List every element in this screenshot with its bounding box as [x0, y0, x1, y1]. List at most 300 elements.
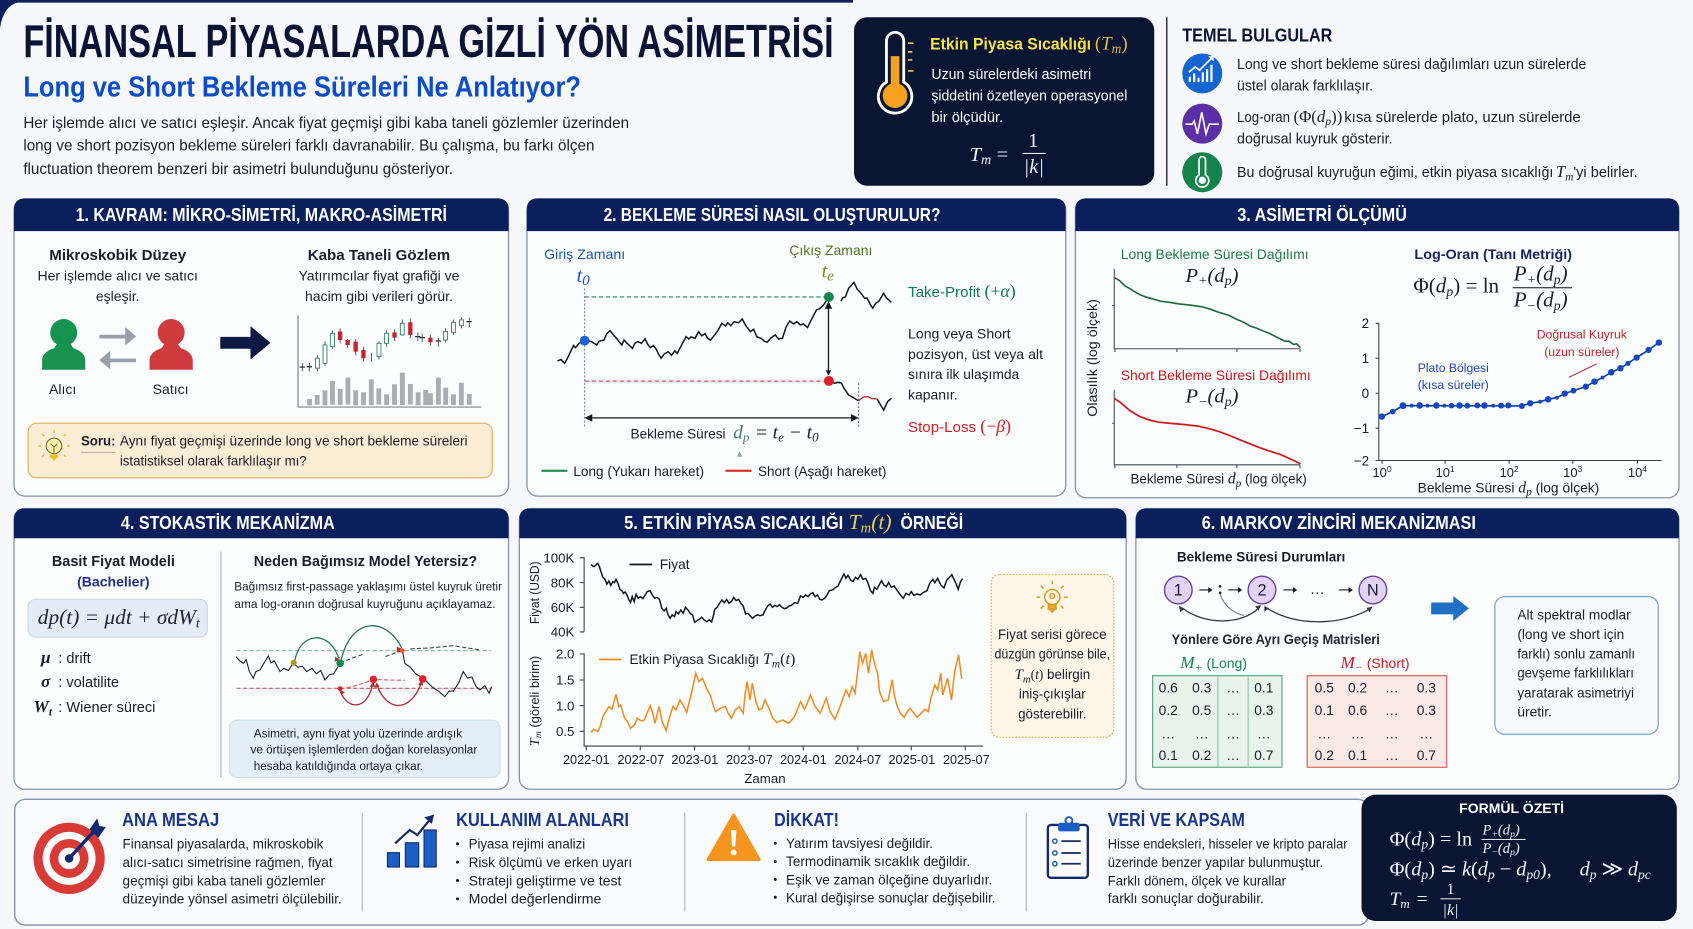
variable legend: : drift	[58, 651, 91, 667]
callout: spectral modes: Alt spektral modlar	[1517, 606, 1631, 622]
formula: log ratio: p	[1509, 847, 1515, 858]
entry label: Giriş Zamanı	[544, 246, 625, 262]
take-profit marker	[824, 292, 834, 302]
title: FİNANSAL PİYASALARDA GİZLİ YÖN ASİMETRİSİ	[23, 15, 834, 67]
formula: log ratio: d	[1503, 841, 1511, 857]
formula: linear tail: p	[1589, 867, 1597, 882]
why independent model fails heading: Neden Bağımsız Model Yetersiz?	[254, 553, 477, 570]
use cases	[456, 809, 632, 907]
matrix: short: 0.3	[1417, 702, 1436, 718]
card text	[931, 67, 1127, 126]
panel 4: stochastic mechanism	[14, 509, 509, 789]
key message: düzeyinde yönsel asimetri ölçülebilir.	[123, 891, 342, 907]
log ratio formula: (	[1536, 262, 1545, 286]
variable legend: σ	[41, 672, 51, 691]
matrix: long: …	[1226, 726, 1240, 742]
callout: temperature note: gösterebilir.	[1018, 707, 1086, 722]
chart: temperature: 2025-07	[943, 752, 990, 767]
finding 2: ))	[1331, 107, 1342, 126]
matrix: long: …	[1226, 680, 1240, 696]
take-profit label: Take-Profit (+α)	[908, 281, 1016, 302]
data and scope: Hisse endeksleri, hisseler ve kripto paralar	[1108, 836, 1348, 852]
arrow: barrier range	[825, 301, 832, 376]
formula: temperature: m	[1400, 896, 1410, 911]
icon: lightbulb	[1037, 581, 1068, 612]
formula: log ratio: p	[1509, 829, 1515, 840]
formula: log ratio: d	[1503, 823, 1511, 839]
chart: temperature: m	[772, 658, 780, 670]
chart: temperature: t)	[785, 650, 795, 668]
holding time formula: t	[807, 422, 812, 443]
note box: Asimetri, aynı fiyat yolu üzerinde ardışık	[254, 726, 463, 740]
legend: Long (Yukarı hareket)	[573, 463, 704, 479]
holding time formula: 0	[812, 430, 819, 445]
chart: log ratio: Doğrusal Kuyruk	[1537, 327, 1628, 341]
chart: temperature: 2025-01	[888, 752, 935, 767]
chart: log ratio: 2	[1362, 316, 1369, 331]
intro paragraph: Her işlemde alıcı ve satıcı eşleşir. Ancak fiyat geçmişi gibi kaba taneli gözlemler üzerinden	[23, 115, 629, 132]
use cases: Model değerlendirme	[469, 891, 602, 907]
matrix: long: 0.2	[1192, 747, 1211, 763]
intro paragraph	[23, 115, 629, 178]
caution	[774, 809, 996, 906]
chart: price: Fiyat	[660, 556, 690, 572]
chart: log ratio: 10	[1500, 465, 1514, 480]
chart: short distribution: P	[1186, 386, 1198, 408]
chart: temperature: (göreli birim)	[527, 656, 542, 731]
chart: log ratio: 0	[1362, 386, 1369, 401]
formula: temperature: 1	[1447, 880, 1455, 898]
card heading: )	[1121, 34, 1128, 55]
caution: Kural değişirse sonuçlar değişebilir.	[786, 890, 996, 906]
matrix: short: 0.6	[1348, 702, 1368, 718]
chart: temperature: 2024-07	[834, 752, 881, 767]
finding 3	[1237, 162, 1638, 183]
chart: log ratio: 10	[1372, 465, 1387, 480]
formula: log ratio: )	[1514, 823, 1520, 839]
exit label: e	[827, 269, 834, 285]
callout: research question	[28, 423, 492, 478]
matrix: long: 0.3	[1254, 702, 1274, 718]
panel 6: markov chain mechanism	[1136, 509, 1679, 789]
panel 1 heading: 1. KAVRAM: MİKRO-SİMETRİ, MAKRO-ASİMETRİ	[76, 204, 447, 225]
formula: linear tail: k(d	[1462, 859, 1488, 881]
chart: long distribution: p	[1224, 273, 1232, 289]
chart: log ratio: 1	[1450, 464, 1455, 474]
chart: log ratio: 3	[1578, 464, 1583, 474]
finding 2	[1237, 107, 1581, 148]
log ratio formula: p	[1553, 298, 1561, 314]
chart: price: 100K	[543, 551, 575, 566]
matrix: long: 0.6	[1159, 680, 1178, 696]
data and scope: VERİ VE KAPSAM	[1108, 809, 1245, 830]
key message: geçmişi gibi kaba taneli gözlemler	[123, 872, 325, 888]
diagram: state chain	[1164, 576, 1387, 622]
formula: log ratio	[1390, 823, 1526, 858]
use cases: KULLANIM ALANLARI	[456, 809, 629, 830]
matrix: long: 0.1	[1254, 680, 1273, 696]
chart: short distribution: (	[1208, 386, 1216, 408]
chart: temperature: m	[533, 731, 544, 738]
holding time formula: Bekleme Süresi	[631, 425, 726, 441]
formula: linear tail: ),	[1540, 859, 1552, 881]
log ratio formula: p	[1553, 272, 1561, 288]
icon: buyer: Alıcı	[49, 381, 76, 397]
key message: Finansal piyasalarda, mikroskobik	[123, 836, 323, 852]
matrix: short: …	[1385, 702, 1399, 718]
formula: Tm = 1/|k|: T	[970, 144, 981, 166]
microscopic level text: eşleşir.	[96, 288, 140, 304]
chart: long distribution	[1112, 246, 1309, 352]
candlestick and volume chart	[298, 315, 482, 407]
card heading: (T	[1095, 34, 1112, 55]
explanation text	[234, 580, 502, 611]
matrix: long: …	[1257, 726, 1271, 742]
chart: long distribution: )	[1231, 265, 1239, 287]
microscopic level text: Mikroskobik Düzey	[49, 247, 187, 264]
intro paragraph: fluctuation theorem benzeri bir asimetri bulunduğunu gösteriyor.	[23, 161, 453, 178]
formula: linear tail: ≫	[1597, 859, 1628, 881]
chart: temperature: 2024-01	[780, 752, 827, 767]
chart: long distribution: +	[1198, 273, 1208, 289]
card text: Uzun sürelerdeki asimetri	[931, 67, 1091, 83]
data and scope: üzerinde benzer yapılar bulunmuştur.	[1108, 854, 1323, 870]
key message: alıcı-satıcı simetrisine rağmen, fiyat	[123, 854, 333, 870]
log ratio heading: Log-Oran (Tanı Metriği)	[1414, 246, 1572, 262]
icon: pulse circle	[1182, 104, 1222, 144]
log ratio formula	[1413, 262, 1572, 314]
card text: bir ölçüdür.	[931, 110, 1003, 126]
panel 4 heading: 4. STOKASTİK MEKANİZMA	[121, 512, 335, 533]
explanation text: ama log-oranın doğrusal kuyruğunu açıklayamaz.	[234, 597, 496, 611]
exit label: Çıkış Zamanı	[789, 242, 872, 258]
icon: buyer	[42, 319, 85, 397]
chart: log ratio: 0	[1387, 464, 1392, 474]
icon: growth bars	[387, 815, 436, 867]
barrier explanation	[908, 325, 1043, 403]
variable legend: : Wiener süreci	[58, 700, 155, 716]
callout: spectral modes: farklı) sonlu zamanlı	[1517, 645, 1635, 661]
log ratio formula: −	[1527, 298, 1536, 314]
formula: linear tail: −	[1495, 859, 1516, 881]
panel: key findings	[1182, 25, 1638, 192]
formula: log ratio: −	[1491, 847, 1498, 858]
finding 3: m	[1565, 171, 1573, 183]
chart: log ratio: 10	[1628, 465, 1642, 480]
holding time formula: = t	[755, 422, 778, 443]
panel 3: asymmetry measurement	[1075, 199, 1679, 499]
log ratio formula: P	[1514, 288, 1527, 312]
chart: log ratio: 4	[1642, 464, 1647, 474]
callout: spectral modes: (long ve short için	[1517, 626, 1624, 642]
panel 5 heading: 5. ETKİN PİYASA SICAKLIĞI	[624, 512, 843, 533]
bottom summary bar	[15, 799, 1369, 926]
finding 1	[1237, 57, 1586, 95]
log ratio formula: ) = ln	[1453, 274, 1500, 298]
callout: temperature note: (	[1031, 667, 1036, 682]
formula: linear tail: p	[1420, 867, 1428, 882]
matrix: short: 0.3	[1417, 680, 1436, 696]
chart: log ratio: −2	[1354, 453, 1369, 468]
matrix: long: 0.5	[1192, 702, 1212, 718]
formula box: dp(t) = μdt + σdW	[38, 605, 196, 629]
variable legend	[33, 648, 155, 718]
legend: Short (Aşağı hareket)	[758, 463, 886, 479]
formula: linear tail: d	[1628, 859, 1639, 881]
formula: temperature	[1390, 880, 1461, 919]
legend	[541, 463, 886, 479]
holding time formula	[631, 422, 819, 445]
formula: linear tail: d	[1580, 859, 1591, 881]
finding 2: kısa sürelerde plato, uzun sürelerde	[1344, 110, 1581, 126]
stop-loss label: Stop-Loss (−β)	[908, 416, 1011, 437]
callout: temperature note: T	[1014, 667, 1024, 683]
matrix: long: 0.2	[1159, 702, 1178, 718]
formula: linear tail: pc	[1637, 867, 1651, 882]
matrix: short: …	[1385, 747, 1399, 763]
chart: temperature	[527, 647, 990, 786]
barrier explanation: kapanır.	[908, 387, 958, 403]
entry label: t	[577, 265, 582, 287]
key message	[122, 809, 342, 907]
matrix: long: …	[1195, 726, 1209, 742]
panel 1: concept	[14, 199, 509, 496]
matrix: short: (Short)	[1363, 655, 1410, 671]
finding 1: üstel olarak farklılaşır.	[1237, 79, 1373, 95]
formula: log ratio: P	[1482, 823, 1491, 839]
y-axis label: Olasılık (log ölçek)	[1085, 299, 1100, 417]
card heading: Etkin Piyasa Sıcaklığı	[930, 35, 1091, 54]
formula: log ratio: ) = ln	[1428, 828, 1472, 850]
log ratio formula: Φ(d	[1413, 274, 1446, 298]
matrix: long: 0.7	[1254, 747, 1273, 763]
chart: temperature: 1.0	[556, 698, 574, 713]
barrier explanation: pozisyon, üst veya alt	[908, 346, 1043, 362]
chart: temperature: 2.0	[556, 647, 574, 662]
panel 5 heading: ÖRNEĞİ	[900, 512, 963, 533]
formula: Tm = 1/|k|	[970, 130, 1046, 178]
matrix: long: (Long)	[1203, 655, 1247, 671]
chart: temperature: 2023-01	[671, 752, 718, 767]
matrix: short: M	[1339, 653, 1356, 672]
arrow: micro to macro	[220, 326, 270, 360]
matrix: short: 0.1	[1348, 747, 1367, 763]
callout: temperature note: iniş-çıkışlar	[1019, 687, 1086, 702]
panel 3 heading: 3. ASİMETRİ ÖLÇÜMÜ	[1237, 204, 1407, 225]
finding 3: T	[1556, 162, 1567, 181]
callout: spectral modes: üretir.	[1517, 704, 1552, 720]
chart: price	[527, 551, 963, 639]
callout: temperature note: m	[1023, 673, 1031, 685]
chart: short distribution: −	[1198, 394, 1208, 410]
formula box: t	[196, 615, 201, 631]
chart: temperature: T	[527, 737, 543, 746]
formula: linear tail: p0	[1525, 867, 1540, 882]
callout: temperature note	[991, 574, 1114, 737]
price path	[557, 297, 829, 363]
chart: temperature: Etkin Piyasa Sıcaklığı T	[629, 650, 772, 668]
formula: log ratio: (	[1498, 841, 1504, 857]
log ratio formula: )	[1560, 262, 1568, 286]
matrix: short: …	[1317, 726, 1331, 742]
question text: Aynı fiyat geçmişi üzerinde long ve short bekleme süreleri	[120, 432, 468, 448]
chart: log ratio: Plato Bölgesi	[1418, 361, 1489, 375]
panel 6 heading: 6. MARKOV ZİNCİRİ MEKANİZMASI	[1202, 512, 1476, 533]
variable legend: W	[33, 697, 50, 716]
states heading: Bekleme Süresi Durumları	[1177, 548, 1345, 564]
panel 5 heading: (	[871, 510, 880, 534]
matrix: short: 0.2	[1315, 747, 1334, 763]
chart: price: Fiyat (USD)	[527, 561, 542, 624]
matrix: long: …	[1226, 702, 1240, 718]
finding 2: (Φ(d	[1294, 107, 1325, 126]
exit label: t	[822, 260, 827, 282]
panel: formula summary	[1362, 795, 1677, 921]
formula: temperature: T	[1390, 889, 1400, 910]
chart: temperature: 2022-07	[617, 752, 664, 767]
icon: seller	[150, 319, 193, 397]
formula box	[28, 599, 207, 637]
matrix: long: …	[1226, 747, 1240, 763]
chart: log ratio: Bekleme Süresi d	[1418, 479, 1526, 496]
panel 5: effective market temperature example	[519, 509, 1126, 789]
holding time formula: e	[778, 430, 784, 445]
panel 5 heading: T	[849, 510, 861, 534]
formula: linear tail: d	[1516, 859, 1527, 881]
data and scope: farklı sonuçlar doğurabilir.	[1108, 890, 1264, 906]
icon: target	[33, 818, 106, 894]
matrix: short: 0.1	[1315, 702, 1334, 718]
finding 3: Bu doğrusal kuyruğun eğimi, etkin piyasa sıcaklığı	[1237, 165, 1553, 181]
chart: price: 60K	[551, 600, 575, 615]
use cases: Strateji geliştirme ve test	[469, 872, 622, 888]
matrix: short: −	[1355, 660, 1363, 674]
caution: Yatırım tavsiyesi değildir.	[786, 835, 933, 851]
entry label: 0	[582, 273, 590, 289]
subtitle: Long ve Short Bekleme Süreleri Ne Anlatıyor?	[23, 72, 581, 104]
formula: Tm = 1/|k|: =	[997, 144, 1008, 166]
caution: DİKKAT!	[774, 809, 839, 830]
matrix: short: …	[1385, 680, 1399, 696]
formula: linear tail: ) ≃	[1428, 859, 1462, 881]
chart: temperature: 2022-01	[563, 752, 610, 767]
holding time formula: d	[733, 422, 743, 443]
finding 2: Log-oran	[1237, 110, 1290, 126]
formula: Tm = 1/|k|: m	[981, 152, 991, 168]
model heading	[52, 553, 175, 589]
callout: spectral modes: gevşeme farklılıkları	[1517, 665, 1634, 681]
panel 5 heading: t)	[878, 510, 892, 534]
holding time formula: −	[784, 422, 807, 443]
icon: seller: Satıcı	[153, 381, 189, 397]
barrier diagram	[544, 242, 891, 457]
diagram: overlapping trades	[236, 626, 492, 705]
arrow: holding time span	[585, 414, 859, 422]
formula: log ratio: p	[1420, 837, 1428, 852]
upper branch	[841, 282, 891, 308]
log ratio formula: d	[1543, 288, 1554, 312]
matrix: long	[1153, 653, 1282, 767]
log ratio formula: p	[1445, 284, 1453, 300]
formula: log ratio: (	[1498, 823, 1504, 839]
formula: linear tail	[1390, 859, 1651, 882]
exit label	[789, 242, 872, 285]
matrix: short: 0.2	[1348, 680, 1367, 696]
log ratio formula: P	[1514, 262, 1527, 286]
chart: log ratio: (kısa süreler)	[1418, 378, 1489, 392]
question text: istatistiksel olarak farklılaşır mı?	[120, 452, 307, 468]
formula: log ratio: Φ(d	[1390, 828, 1421, 850]
matrix: short: …	[1351, 726, 1365, 742]
coarse observation text: Kaba Taneli Gözlem	[308, 247, 450, 264]
diagram: state chain: N	[1367, 582, 1379, 600]
finding 2: doğrusal kuyruk gösterir.	[1237, 132, 1393, 148]
diagram: state chain: 2	[1257, 582, 1266, 600]
chart: short distribution: d	[1214, 386, 1225, 408]
diagram: state chain: …	[1310, 581, 1325, 598]
matrix: long: +	[1195, 660, 1203, 674]
coarse observation text: Yatırımcılar fiyat grafiği ve	[298, 268, 460, 284]
formula: temperature: =	[1417, 889, 1428, 910]
model heading: (Bachelier)	[77, 573, 150, 589]
formula: Tm = 1/|k|: 1	[1028, 130, 1038, 152]
microscopic level text: Her işlemde alıcı ve satıcı	[37, 268, 198, 284]
matrix: short	[1307, 653, 1447, 767]
microscopic level text	[37, 247, 198, 304]
model heading: Basit Fiyat Modeli	[52, 553, 175, 570]
barrier explanation: sınıra ilk ulaşımda	[908, 366, 1019, 382]
chart: price: 40K	[551, 624, 575, 639]
note box	[229, 720, 500, 777]
matrix: long: 0.1	[1159, 747, 1178, 763]
formula summary heading: FORMÜL ÖZETİ	[1459, 800, 1564, 816]
finding 2: p	[1324, 114, 1331, 128]
chart: log ratio: 2	[1514, 464, 1519, 474]
chart: log ratio: 10	[1436, 465, 1450, 480]
key message: ANA MESAJ	[122, 809, 219, 830]
use cases: Risk ölçümü ve erken uyarı	[469, 854, 632, 870]
chart: log ratio: (uzun süreler)	[1544, 345, 1619, 359]
chart: long distribution: P	[1186, 265, 1198, 287]
icon: lightbulb	[38, 430, 70, 461]
callout: temperature note: Fiyat serisi görece	[998, 627, 1107, 642]
chart: short distribution	[1112, 367, 1311, 490]
panel 2 heading: 2. BEKLEME SÜRESİ NASIL OLUŞTURULUR?	[604, 204, 940, 225]
finding 3: 'yi belirler.	[1573, 165, 1638, 181]
chart: price: 80K	[551, 575, 575, 590]
entry marker	[580, 336, 590, 346]
chart: short distribution: p	[1224, 394, 1232, 410]
log ratio formula: )	[1560, 288, 1568, 312]
panel 5 heading	[624, 510, 963, 536]
callout: temperature note: düzgün görünse bile,	[995, 647, 1110, 662]
arrow: to spectral modes	[1431, 596, 1469, 621]
explanation text: Bağımsız first-passage yaklaşımı üstel kuyruk üretir	[234, 580, 502, 594]
chart: short distribution: Short Bekleme Süresi Dağılımı	[1121, 367, 1311, 383]
formula: linear tail: p	[1487, 867, 1495, 882]
formula: log ratio: +	[1491, 829, 1498, 840]
callout: spectral modes	[1495, 597, 1658, 734]
card heading: m	[1112, 41, 1122, 56]
log ratio formula: (	[1536, 288, 1545, 312]
variable legend: μ	[40, 648, 51, 667]
icon: chart circle	[1182, 53, 1222, 93]
callout: spectral modes: yaratarak asimetriyi	[1517, 684, 1634, 700]
caution: Termodinamik sıcaklık değildir.	[786, 853, 970, 869]
card text: şiddetini özetleyen operasyonel	[931, 88, 1127, 104]
holding time formula: p	[742, 430, 750, 445]
panel 2: holding time	[527, 199, 1066, 496]
